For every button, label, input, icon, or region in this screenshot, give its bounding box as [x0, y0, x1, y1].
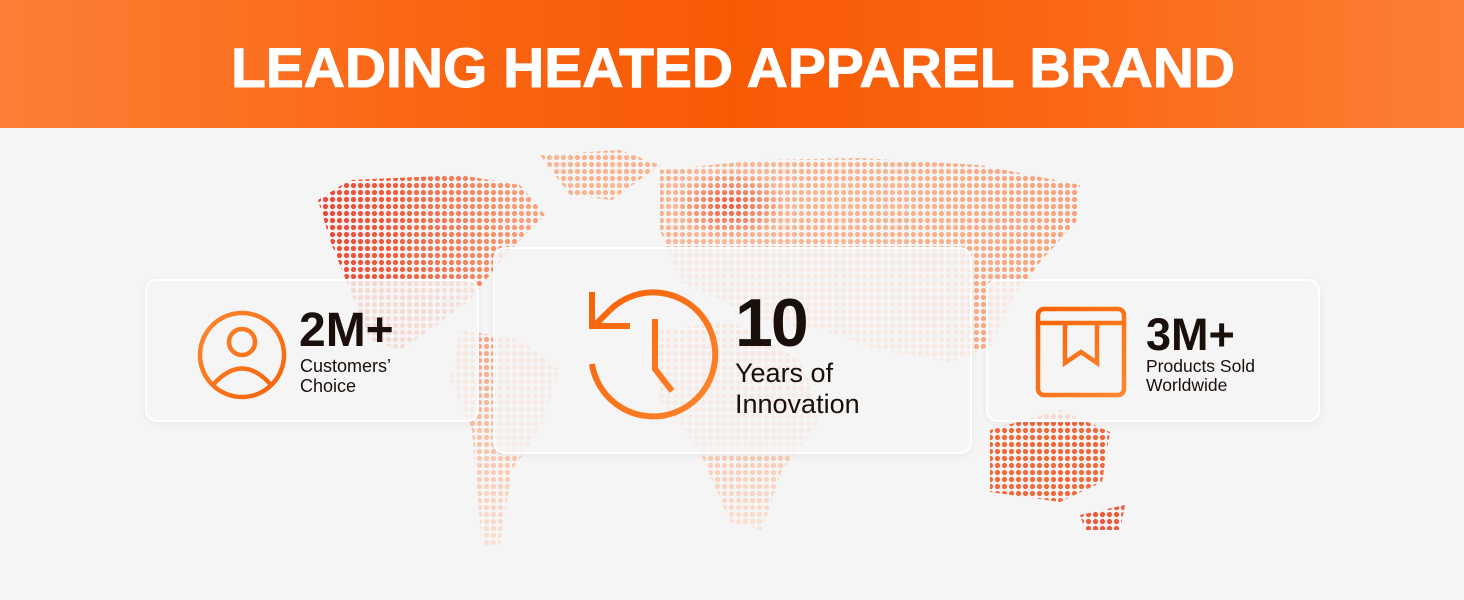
icon: clock — [589, 289, 718, 420]
card: years — [493, 247, 972, 454]
stat text: 2M+ — [299, 304, 394, 357]
stat text: Products Sold — [1146, 356, 1255, 376]
world map dots — [318, 150, 1125, 545]
stat text: Years of — [735, 358, 833, 388]
icon: person — [198, 310, 286, 400]
stat text: Innovation — [735, 389, 860, 419]
icon: box — [1036, 306, 1126, 398]
stat text: 10 — [735, 285, 807, 361]
stat text: Customers’ — [300, 356, 391, 376]
card: customers — [145, 279, 479, 422]
stat text — [735, 285, 860, 419]
stat text: 3M+ — [1146, 309, 1235, 360]
header banner — [0, 0, 1464, 128]
stat text — [299, 304, 394, 396]
stat text: Choice — [300, 376, 356, 396]
stat text: Worldwide — [1146, 375, 1227, 395]
stat text — [1146, 309, 1255, 395]
card: products — [986, 279, 1320, 422]
title: LEADING HEATED APPAREL BRAND — [231, 36, 1235, 99]
